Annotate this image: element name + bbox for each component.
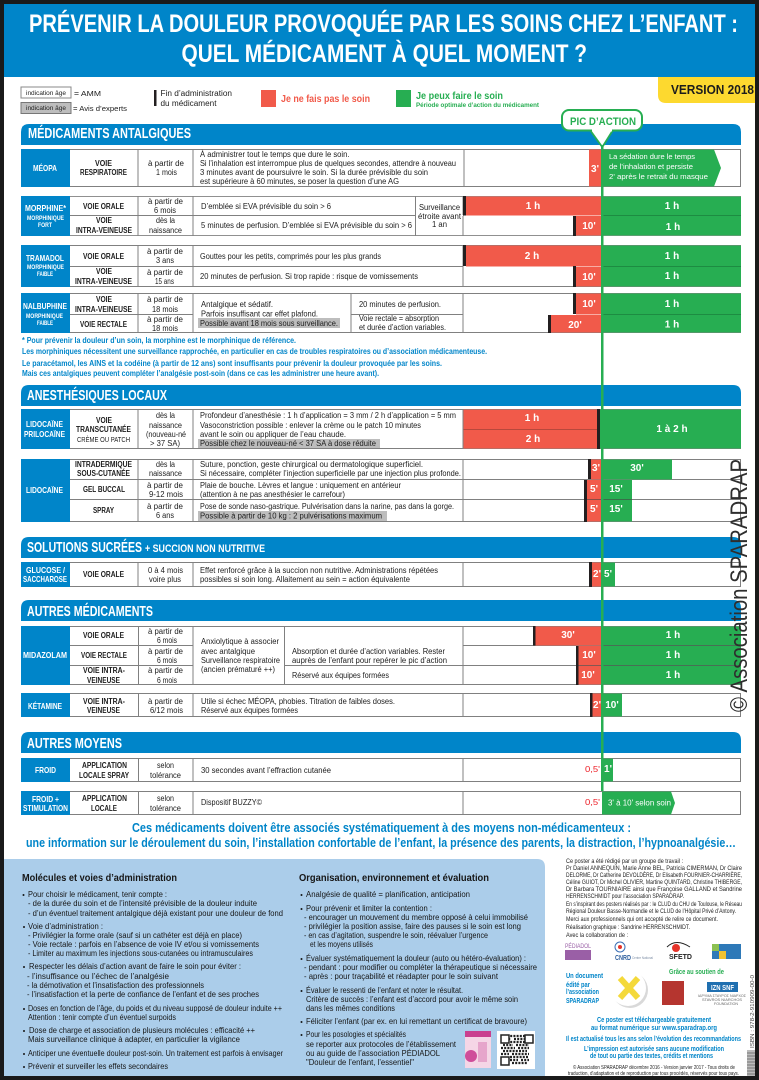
legend: = Avis d’experts — [73, 104, 127, 113]
row: Froid + stimulation: selon — [157, 794, 174, 803]
row: Tramadol: 15 ans — [155, 277, 174, 286]
row: Midazolam — [21, 626, 741, 685]
row: Méopa: MÉOPA — [33, 163, 57, 173]
row: Froid: FROID — [35, 765, 56, 775]
publisher mention: SPARADRAP — [566, 996, 599, 1005]
column: organisation, environnement et évaluation: Évaluer systématiquement la douleur (auto ou hétéro-évaluation) : — [306, 954, 526, 963]
row: Lidocaïne prilocaïne: CRÈME OU PATCH — [77, 435, 130, 444]
row: Glucose saccharose: 2' — [593, 569, 601, 580]
column: organisation, environnement et évaluation: et les moyens utilisés — [310, 940, 373, 949]
row: Froid + stimulation: STIMULATION — [23, 803, 68, 813]
row: Nalbuphine: NALBUPHINE — [23, 301, 67, 311]
sponsors: STAVROS NIARCHOS — [702, 998, 743, 1002]
logo: Sparadrap — [610, 970, 648, 1008]
row: Froid: 1' — [604, 764, 612, 775]
legend: Fin d’administration — [160, 89, 232, 98]
row: Lidocaïne: à partir de — [147, 481, 184, 490]
section header: médicaments antalgiques: MÉDICAMENTS ANTALGIQUES — [28, 125, 191, 142]
row: Lidocaïne prilocaïne: VOIE — [96, 416, 113, 425]
row: Tramadol: 20 minutes de perfusion. Si trop rapide : risque de vomissements — [200, 272, 418, 281]
row: Méopa: 3 minutes avant de poursuivre le soin. Si la durée prévisible du soin — [200, 168, 428, 177]
column: molécules et voies d'administration: - l’insatisfaction et la perte de confiance de l’enfant et de ses proches — [27, 990, 259, 999]
icon: QR code — [497, 1031, 535, 1069]
row: Lidocaïne: Possible à partir de 10 kg : 2 pulvérisations maximum — [200, 512, 382, 520]
row: Nalbuphine: à partir de — [147, 315, 184, 324]
row: Glucose saccharose: GLUCOSE / — [26, 565, 66, 575]
row: Lidocaïne: naissance — [149, 469, 182, 478]
row: Froid + stimulation: Dispositif BUZZY© — [201, 798, 262, 807]
title banner: QUEL MÉDICAMENT À QUEL MOMENT ? — [182, 39, 587, 68]
row: Nalbuphine: 18 mois — [152, 324, 178, 333]
row: Lidocaïne: 6 ans — [156, 511, 174, 520]
row: Midazolam: auprès de l’enfant pour repérer le pic d’action — [292, 656, 447, 665]
column: organisation, environnement et évaluation: "Douleur de l’enfant, l’essentiel" — [306, 1058, 414, 1067]
row: Tramadol: 3 ans — [156, 256, 174, 265]
row: Morphine: FORT — [38, 222, 52, 229]
row: Froid + stimulation: APPLICATION — [82, 794, 127, 803]
row: Kétamine: 6/12 mois — [150, 706, 183, 715]
row: Froid — [21, 758, 740, 782]
row: Morphine: VOIE — [96, 216, 113, 225]
credits — [566, 859, 743, 939]
row: Nalbuphine — [21, 293, 741, 333]
column: organisation, environnement et évaluation: Évaluer le ressenti de l’enfant et noter le résultat. — [306, 986, 463, 995]
publisher mention: Un document — [566, 971, 603, 980]
row: Kétamine: 2' — [593, 700, 601, 711]
row: Froid + stimulation: tolérance — [150, 804, 182, 813]
legend: Je peux faire le soin — [416, 91, 503, 102]
row: Lidocaïne: 9-12 mois — [149, 490, 183, 499]
row: Morphine: 1 an — [432, 220, 447, 229]
row: Morphine: D’emblée si EVA prévisible du soin > 6 — [201, 202, 332, 211]
column: organisation, environnement et évaluation: Critère de succès : l’enfant est d’accord pour avoir le même soin — [306, 995, 518, 1004]
section header: anesthésiques locaux — [21, 385, 741, 406]
row: Morphine: 1 h — [526, 201, 540, 212]
row: Lidocaïne prilocaïne: LIDOCAÏNE — [26, 419, 63, 429]
column: organisation, environnement et évaluation: - pendant : pour modifier ou compléter la thérapeutique si nécessaire — [304, 963, 538, 972]
row: Nalbuphine: Antalgique et sédatif. — [201, 300, 273, 309]
row: Nalbuphine: à partir de — [147, 295, 184, 304]
note: morphiniques et antalgiques: Mais ces antalgiques peuvent compléter l’analgésie post-soin (dans ce cas les administrer une heure avant). — [22, 369, 379, 378]
column: organisation, environnement et évaluation: Féliciter l’enfant (par ex. en lui remettant un certificat de bravoure) — [306, 1017, 527, 1026]
row: Lidocaïne: 30' — [630, 463, 644, 474]
row: Glucose saccharose: VOIE ORALE — [83, 570, 125, 579]
row: Nalbuphine: INTRA-VEINEUSE — [75, 305, 133, 314]
row: Nalbuphine: 1 h — [665, 299, 679, 310]
row: Midazolam: VOIE ORALE — [83, 631, 125, 640]
row: Morphine: 10' — [582, 221, 596, 232]
row: Morphine: VOIE ORALE — [83, 202, 125, 211]
row: Nalbuphine: Possible avant 18 mois sous surveillance. — [200, 319, 338, 328]
legend: Période optimale d’action du médicament — [416, 102, 540, 109]
row: Midazolam: 1 h — [666, 650, 680, 661]
row: Morphine: dès la — [156, 216, 175, 225]
row: Tramadol: à partir de — [147, 268, 184, 277]
row: Midazolam: Surveillance respiratoire — [201, 656, 280, 665]
row: Kétamine: VOIE INTRA- — [83, 697, 125, 706]
logos: partners: PÉDIADOL — [565, 941, 591, 950]
row: Midazolam: 6 mois — [157, 676, 177, 685]
row: Nalbuphine: VOIE RECTALE — [80, 320, 128, 329]
credits: HERRENSCHMIDT pour l’association SPARADRAP. — [566, 894, 684, 900]
row: Glucose saccharose: voire plus — [149, 575, 181, 584]
closing message: Ces médicaments doivent être associés systématiquement à des moyens non-médicamenteux : — [132, 820, 631, 835]
row: Lidocaïne: 3' — [592, 463, 600, 474]
row: Midazolam: 1 h — [666, 670, 680, 681]
column: organisation, environnement et évaluation: dans les mêmes conditions — [306, 1004, 395, 1013]
row: Tramadol: MORPHINIQUE — [27, 264, 65, 271]
row: Nalbuphine: 18 mois — [152, 305, 178, 314]
row: Méopa: Si l’inhalation est interrompue plus de quelques secondes, attendre à nouveau — [200, 159, 456, 168]
note: morphiniques et antalgiques — [22, 336, 487, 378]
row: Midazolam: VOIE INTRA- — [83, 666, 125, 675]
row: Lidocaïne prilocaïne: dès la — [156, 411, 175, 420]
row: Lidocaïne: INTRADERMIQUE — [75, 460, 133, 469]
column: organisation, environnement et évaluation: Pour les posologies et spécialités — [306, 1030, 406, 1039]
row: Midazolam: 6 mois — [157, 656, 177, 665]
row: Lidocaïne: Suture, ponction, geste chirurgical ou dermatologique superficiel. — [200, 460, 423, 469]
section header: anesthésiques locaux: ANESTHÉSIQUES LOCAUX — [27, 387, 167, 404]
row: Tramadol: à partir de — [147, 247, 184, 256]
legend: indication âge — [26, 91, 67, 97]
row: Nalbuphine: FAIBLE — [37, 320, 53, 327]
row: Morphine: à partir de — [148, 197, 184, 206]
row: Morphine: étroite avant — [418, 212, 462, 221]
row: Lidocaïne prilocaïne: Vasoconstriction possible : enlever la crème ou le patch 10 minutes — [200, 421, 421, 430]
credits: Ce poster a été rédigé par un groupe de travail : — [566, 859, 683, 865]
row: Tramadol: 1 h — [665, 271, 679, 282]
row: Lidocaïne: 5' — [590, 504, 598, 515]
row: Méopa: est supérieure à 60 minutes, se poser la question d’une AG — [200, 177, 399, 186]
publisher mention: édité par — [566, 980, 590, 989]
row: Midazolam: Réservé aux équipes formées — [292, 671, 389, 680]
watermark: copyright: © Association SPARADRAP — [726, 459, 753, 712]
legend: Je ne fais pas le soin — [281, 94, 370, 105]
row: Méopa: RESPIRATOIRE — [80, 168, 128, 177]
row: Froid + stimulation: 3' à 10' selon soin — [608, 798, 671, 808]
row: Nalbuphine: 10' — [582, 299, 596, 310]
row: Lidocaïne: Plaie de bouche. Lèvres et langue : uniquement en antérieur — [200, 481, 401, 490]
legend — [21, 87, 540, 114]
row: Lidocaïne: SPRAY — [93, 506, 115, 515]
row: Lidocaïne prilocaïne: (nouveau-né — [146, 430, 186, 439]
column: molécules et voies d'administration: Respecter les délais d’action avant de faire le soin pour éviter : — [29, 962, 241, 971]
row: Lidocaïne: 15' — [609, 484, 623, 495]
vertical reference and barcode: ISBN : 978-2-910909-00-0 — [750, 975, 756, 1048]
row: Tramadol: INTRA-VEINEUSE — [75, 277, 133, 286]
row: Glucose saccharose: Effet renforcé grâce à la succion non nutritive. Administrations répétées — [200, 566, 438, 575]
row: Lidocaïne: 15' — [609, 504, 623, 515]
row: Midazolam: 10' — [581, 670, 595, 681]
sponsors: ΙΔΡΥΜΑ ΣΤΑΥΡΟΣ ΝΙΑΡΧΟΣ — [698, 994, 747, 998]
row: Kétamine: à partir de — [148, 697, 184, 706]
row: Lidocaïne prilocaïne: Possible chez le nouveau-né < 37 SA à dose réduite — [200, 439, 377, 448]
note: morphiniques et antalgiques: Le paracétamol, les AINS et la codéine (à partir de 12 ans) sont insuffisants pour prévenir la douleur provoquée par les soins. — [22, 359, 442, 368]
row: Lidocaïne — [21, 459, 741, 522]
row: Midazolam: à partir de — [148, 627, 184, 636]
section header: solutions sucrées: SOLUTIONS SUCRÉES — [27, 539, 142, 556]
row: Nalbuphine: Parfois insuffisant car effet plafond. — [201, 310, 318, 318]
row: Morphine: Surveillance — [419, 203, 461, 212]
publisher mention — [566, 971, 603, 1005]
column: molécules et voies d'administration: Voie d’administration : — [28, 922, 103, 931]
row: Morphine: MORPHINE* — [25, 203, 67, 213]
legend: indication âge — [26, 106, 67, 112]
note: morphiniques et antalgiques: * Pour prévenir la douleur d’un soin, la morphine est le morphinique de référence. — [22, 336, 296, 345]
row: Nalbuphine: et durée d’action variables. — [359, 323, 446, 332]
row: Midazolam: avec antalgique — [201, 647, 256, 656]
legend: du médicament — [160, 99, 217, 108]
row: Lidocaïne prilocaïne: 1 h — [525, 413, 539, 424]
row: Kétamine: VEINEUSE — [87, 706, 121, 715]
row: Morphine: 1 h — [666, 222, 680, 233]
column: molécules et voies d'administration: Prévenir et surveiller les effets secondaires — [28, 1062, 168, 1071]
row: Lidocaïne prilocaïne: 2 h — [526, 434, 540, 445]
section header: autres médicaments: AUTRES MÉDICAMENTS — [27, 603, 153, 620]
row: Glucose saccharose: 0 à 4 mois — [148, 566, 183, 575]
row: Froid + stimulation: FROID + — [32, 794, 59, 804]
title banner — [4, 4, 755, 77]
version badge: VERSION 2018 — [671, 83, 754, 97]
row: Méopa: À administrer tout le temps que dure le soin. — [200, 150, 350, 159]
download and copyright notice: de tout ou partie des textes, crédits et mentions — [590, 1051, 713, 1060]
column: molécules et voies d'administration: Anticiper une éventuelle douleur post-soin. Un traitement est parfois à envisager — [28, 1049, 283, 1058]
row: Glucose saccharose — [21, 562, 740, 587]
download and copyright notice — [566, 1015, 741, 1077]
row: Kétamine: Utile si échec MÉOPA, phobies. Titration de faibles doses. — [201, 697, 395, 706]
row: Midazolam: MIDAZOLAM — [23, 650, 67, 660]
row: Tramadol: 2 h — [525, 251, 539, 262]
row: Midazolam: à partir de — [148, 647, 184, 656]
row: Tramadol: VOIE — [96, 267, 113, 276]
sponsors — [662, 967, 747, 1006]
row: Morphine: 1 h — [665, 201, 679, 212]
column: molécules et voies d'administration: - l’insuffisance ou l’échec de l’analgésie — [27, 972, 170, 981]
credits: Dr Barbara TOURNIAIRE ainsi que Françoise GALLAND et Sandrine — [566, 887, 743, 893]
version badge — [658, 77, 755, 103]
row: Midazolam: 1 h — [666, 630, 680, 641]
closing message — [26, 820, 736, 850]
row: Kétamine: 10' — [605, 700, 619, 711]
row: Kétamine: KÉTAMINE — [28, 701, 62, 711]
note: morphiniques et antalgiques: Les morphiniques nécessitent une surveillance rapprochée, en particulier en cas de troubles respiratoires ou d’association médicamenteuse. — [22, 347, 487, 356]
row: Froid: 0,5' — [585, 764, 600, 774]
row: Méopa: 1 mois — [156, 168, 177, 177]
column: organisation, environnement et évaluation: - après : pour traçabilité et réadapter pour le soin suivant — [304, 972, 499, 981]
credits: Réalisation graphique : Sandrine HERRENSCHMIDT. — [566, 925, 690, 931]
column: molécules et voies d'administration: Doses en fonction de l’âge, du poids et du niveau supposé de douleur induite ++ — [28, 1004, 282, 1013]
row: Lidocaïne: Si nécessaire, compléter l’injection superficielle par une injection plus profonde. — [200, 469, 461, 478]
row: Froid: LOCALE SPRAY — [79, 771, 130, 780]
row: Nalbuphine: 20' — [568, 320, 582, 331]
row: Lidocaïne: LIDOCAÏNE — [26, 485, 63, 495]
row: Méopa: La sédation dure le temps — [609, 152, 695, 161]
row: Tramadol — [21, 245, 741, 287]
download and copyright notice: au format numérique sur www.sparadrap.org — [591, 1023, 717, 1032]
credits: Pr Daniel ANNEQUIN, Marie Anne BEL, Patricia CIMERMAN, Dr Claire — [566, 866, 743, 872]
download and copyright notice: Ce poster est téléchargeable gratuitement — [597, 1015, 711, 1024]
row: Morphine: 6 mois — [154, 206, 176, 215]
row: Lidocaïne prilocaïne — [21, 409, 741, 449]
row: Tramadol: VOIE ORALE — [83, 252, 125, 261]
row: Midazolam: 10' — [582, 650, 596, 661]
row: Froid: selon — [157, 761, 174, 770]
row: Lidocaïne: (attention à ne pas anesthésier le carrefour) — [200, 490, 345, 499]
column: organisation, environnement et évaluation — [299, 873, 538, 1067]
row: Morphine: MORPHINIQUE — [27, 215, 65, 222]
logos: partners: SFETD — [669, 954, 692, 961]
row: Méopa: de l’inhalation et persiste — [609, 162, 693, 171]
column: organisation, environnement et évaluation: se reporter aux protocoles de l’établissement — [306, 1040, 457, 1049]
row: Midazolam: Anxiolytique à associer — [201, 637, 279, 646]
row: Méopa: 2' après le retrait du masque — [609, 172, 708, 181]
section header: solutions sucrées: + SUCCION NON NUTRITIVE — [145, 543, 265, 555]
column: organisation, environnement et évaluation: Pour prévenir et limiter la contention : — [306, 904, 432, 913]
icon: booklet cover — [465, 1031, 491, 1068]
row: Lidocaïne prilocaïne: avant le soin ou appliquer de l’eau chaude. — [200, 430, 346, 439]
sponsors: Grâce au soutien de — [669, 967, 724, 976]
sponsors: FOUNDATION — [714, 1002, 738, 1006]
row: Tramadol: TRAMADOL — [26, 253, 64, 263]
row: Méopa: à partir de — [148, 159, 185, 168]
panel: conseils — [4, 859, 545, 1076]
logos: partners — [565, 941, 741, 962]
column: molécules et voies d'administration: Dose de charge et association de plusieurs molécules : efficacité ++ — [29, 1026, 255, 1035]
row: Méopa: 3' — [591, 164, 599, 175]
row: Nalbuphine: 20 minutes de perfusion. — [359, 300, 441, 309]
section header: autres moyens: AUTRES MOYENS — [27, 735, 122, 752]
row: Midazolam: 30' — [561, 630, 575, 641]
row: Glucose saccharose: SACCHAROSE — [23, 574, 67, 584]
row: Midazolam: à partir de — [148, 666, 184, 675]
row: Tramadol: 1 h — [665, 251, 679, 262]
row: Midazolam: Absorption et durée d’action variables. Rester — [292, 647, 445, 656]
column: molécules et voies d'administration: - Privilégier la forme orale (sauf si un cathéter est déjà en place) — [28, 931, 242, 940]
row: Morphine: INTRA-VEINEUSE — [76, 226, 133, 235]
column: molécules et voies d'administration: - Voie rectale : parfois en l’absence de voie IV et/ou si vomissements — [28, 940, 259, 949]
row: Méopa: VOIE — [95, 159, 113, 168]
row: Tramadol: 10' — [582, 272, 596, 283]
column: organisation, environnement et évaluation: - en cas d’agitation, suspendre le soin, réévaluer l’urgence — [304, 931, 488, 940]
column: organisation, environnement et évaluation: - encourager un mouvement du membre opposé à celui immobilisé — [304, 913, 529, 922]
row: Lidocaïne prilocaïne: > 37 SA) — [150, 439, 180, 448]
section header: solutions sucrées — [21, 537, 741, 558]
row: Midazolam: VOIE RECTALE — [81, 651, 128, 660]
row: Nalbuphine: Voie rectale = absorption — [359, 314, 439, 323]
row: Froid: 30 secondes avant l’effraction cutanée — [201, 766, 332, 775]
row: Nalbuphine: MORPHINIQUE — [26, 313, 64, 320]
column: organisation, environnement et évaluation: Analgésie de qualité = planification, anticipation — [306, 890, 470, 899]
row: Midazolam: VEINEUSE — [87, 676, 121, 685]
column: molécules et voies d'administration — [22, 873, 283, 1071]
row: Midazolam: (ancien prématuré ++) — [201, 665, 275, 674]
row: Nalbuphine: 1 h — [665, 320, 679, 330]
peak-of-action line and marker: PIC D’ACTION — [570, 116, 636, 128]
row: Lidocaïne: GEL BUCCAL — [83, 485, 125, 494]
row: Morphine: 5 minutes de perfusion. D’emblée si EVA prévisible du soin > 6 — [201, 221, 413, 230]
row: Tramadol: FAIBLE — [37, 271, 53, 278]
column: molécules et voies d'administration: - d’un éventuel traitement antalgique déjà existant pour une douleur de fond — [28, 909, 283, 918]
column: molécules et voies d'administration: Pour choisir le médicament, tenir compte : — [28, 890, 167, 899]
row: Froid + stimulation: 0,5' — [585, 797, 600, 807]
row: Lidocaïne: à partir de — [147, 502, 184, 511]
column: organisation, environnement et évaluation: Organisation, environnement et évaluation — [299, 873, 489, 884]
row: Morphine — [21, 196, 741, 236]
logos: partners: Centre National — [632, 956, 653, 960]
row: Lidocaïne prilocaïne: naissance — [149, 421, 182, 430]
row: Lidocaïne: SOUS-CUTANÉE — [77, 469, 131, 478]
column: molécules et voies d'administration: Molécules et voies d’administration — [22, 873, 177, 884]
row: Lidocaïne: 5' — [590, 484, 598, 495]
publisher mention: l’association — [566, 987, 599, 996]
column: molécules et voies d'administration: - de la durée du soin et de l’intensité prévisible de la douleur induite — [28, 899, 258, 908]
row: Kétamine — [21, 693, 740, 717]
column: organisation, environnement et évaluation: - privilégier la position assise, faire des pauses si le soin est long — [304, 922, 521, 931]
sponsors: IZN SNF — [711, 985, 735, 992]
section header: autres moyens — [21, 732, 741, 753]
column: molécules et voies d'administration: - la démotivation et l’insatisfaction des professionnels — [27, 981, 204, 990]
row: Lidocaïne prilocaïne: TRANSCUTANÉE — [76, 425, 132, 434]
row: Froid + stimulation: LOCALE — [91, 804, 118, 813]
legend: = AMM — [74, 89, 101, 98]
column: molécules et voies d'administration: Mais surveillance clinique à adapter, en particulier la vigilance — [28, 1035, 241, 1044]
row: Lidocaïne: dès la — [156, 460, 175, 469]
row: Morphine: naissance — [149, 226, 182, 235]
section header: médicaments antalgiques — [21, 124, 741, 145]
column: organisation, environnement et évaluation: ou au guide de l’association PÉDIADOL — [306, 1049, 441, 1058]
row: Lidocaïne prilocaïne: 1 à 2 h — [656, 424, 688, 435]
credits: Avec la collaboration de : — [566, 933, 628, 939]
row: Midazolam: 6 mois — [157, 636, 177, 645]
column: molécules et voies d'administration: - Limiter au maximum les injections sous-cutanées ou intramusculaires — [28, 949, 253, 958]
row: Tramadol: Gouttes pour les petits, comprimés pour les plus grands — [200, 252, 381, 261]
credits: Merci aux professionnels qui ont accepté de relire ce document. — [566, 917, 718, 923]
peak-of-action line and marker — [562, 110, 642, 791]
column: molécules et voies d'administration: Attention : tenir compte d’un éventuel surpoids — [28, 1013, 176, 1022]
row: Kétamine: Réservé aux équipes formées — [201, 706, 298, 715]
row: Lidocaïne prilocaïne: Profondeur d’anesthésie : 1 h d’application = 3 mm / 2 h d’application = 5 mm — [200, 411, 456, 420]
row: Froid: tolérance — [150, 771, 182, 780]
row: Méopa — [21, 149, 740, 187]
row: Lidocaïne: Pose de sonde naso-gastrique. Pulvérisation dans la narine, pas dans la gorge. — [200, 502, 454, 511]
row: Froid + stimulation — [21, 791, 740, 815]
row: Glucose saccharose: 5' — [604, 569, 612, 580]
logos: partners: CNRD — [615, 955, 631, 962]
vertical reference and barcode — [747, 975, 756, 1076]
row: Froid: APPLICATION — [82, 761, 127, 770]
section header: autres médicaments — [21, 600, 741, 621]
row: Glucose saccharose: possibles si soin long. Allaitement au sein = action équivalente — [200, 575, 411, 584]
row: Nalbuphine: VOIE — [96, 295, 113, 304]
row: Lidocaïne prilocaïne: PRILOCAÏNE — [24, 429, 65, 439]
